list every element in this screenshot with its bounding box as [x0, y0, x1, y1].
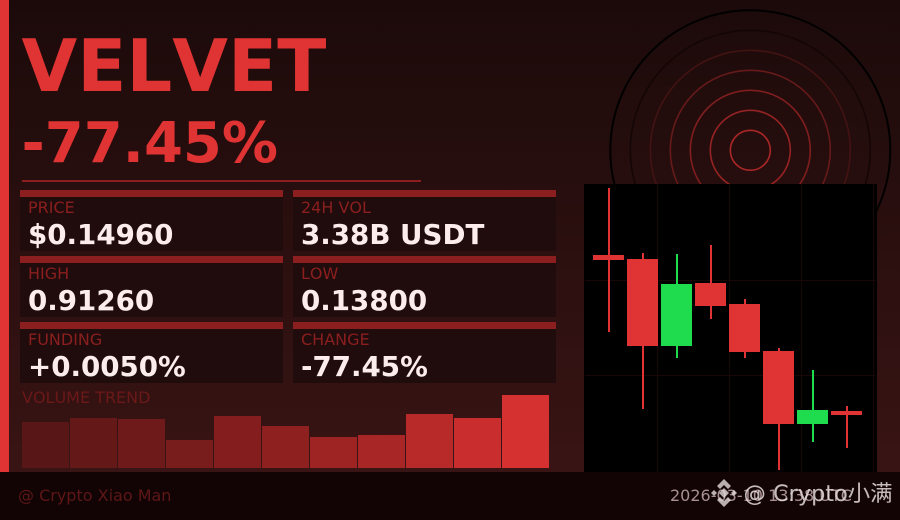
stat card: price [20, 190, 283, 251]
stat card: change: CHANGE [301, 330, 370, 349]
title: VELVET [22, 24, 326, 108]
candle 5 [729, 299, 760, 358]
stat card: high [20, 256, 283, 317]
candle 8 [831, 406, 862, 448]
candlestick chart [584, 184, 877, 472]
stat card: high: 0.91260 [28, 284, 154, 317]
candle 6 [763, 348, 794, 470]
stat card: low [293, 256, 556, 317]
stat card: price: PRICE [28, 198, 75, 217]
stat card: 24h volume: 24H VOL [301, 198, 371, 217]
change percentage: -77.45% [22, 111, 278, 176]
heading divider [22, 180, 421, 182]
candle 2 [627, 253, 658, 409]
stat card: funding: +0.0050% [28, 350, 186, 383]
candle 7 [797, 370, 828, 442]
stat card: change [293, 322, 556, 383]
stat card: funding [20, 322, 283, 383]
concentric circles [610, 10, 890, 290]
stat card: low: 0.13800 [301, 284, 427, 317]
footer handle: @ Crypto Xiao Man [18, 486, 171, 505]
stat card: high: HIGH [28, 264, 69, 283]
stat card: funding: FUNDING [28, 330, 102, 349]
stat card: price: $0.14960 [28, 218, 173, 251]
stat card: 24h volume: 3.38B USDT [301, 218, 484, 251]
volume trend label: VOLUME TREND [22, 388, 150, 407]
volume bar chart [22, 395, 549, 468]
stat card: change: -77.45% [301, 350, 428, 383]
watermark icon: diamond logo [711, 479, 737, 507]
candle 3 [661, 254, 692, 358]
candle 4 [695, 245, 726, 319]
stat card: low: LOW [301, 264, 339, 283]
footer timestamp: 2026-03-10 13:38 UTC [670, 486, 852, 505]
candle 1 [593, 188, 624, 332]
footer bar [0, 472, 900, 520]
watermark text: @ Crypto小满 [744, 481, 893, 507]
accent bar [0, 0, 9, 472]
stat card: 24h volume [293, 190, 556, 251]
